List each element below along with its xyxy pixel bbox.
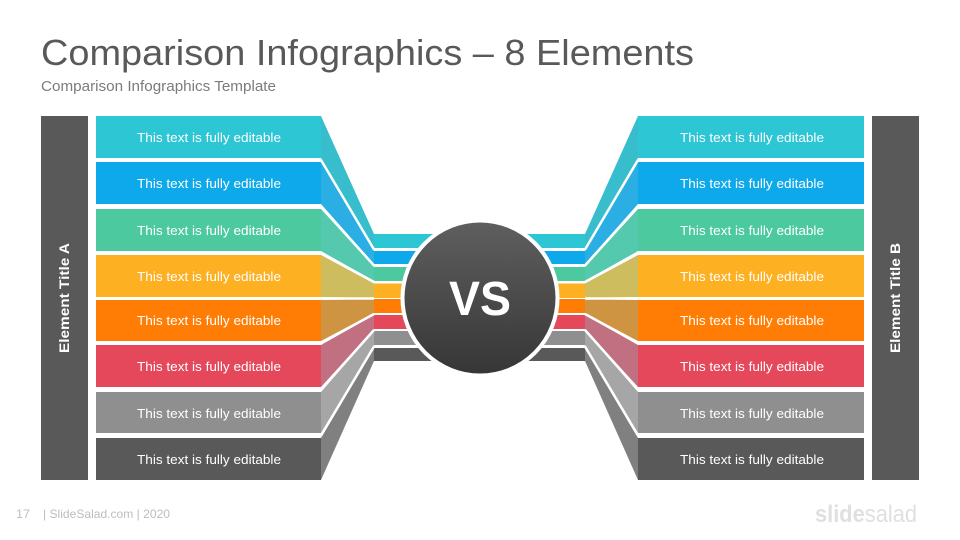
- right row 2: [480, 162, 864, 264]
- logo: slidesalad: [815, 501, 917, 528]
- left side bars: [96, 116, 480, 480]
- right row 5: [480, 299, 864, 341]
- right side bars: [480, 116, 864, 480]
- panel: element title A: [41, 116, 88, 480]
- right row 1: [480, 116, 864, 248]
- right row 6: [480, 315, 864, 387]
- left row 4: This text is fully editable: [137, 270, 281, 284]
- right row 4: [480, 255, 864, 298]
- right row 3: [480, 209, 864, 281]
- left row 1: This text is fully editable: [137, 131, 281, 145]
- right row 6: This text is fully editable: [680, 360, 824, 374]
- left row 6: [96, 315, 480, 387]
- VS circle: [402, 220, 558, 376]
- left row 5: This text is fully editable: [137, 314, 281, 328]
- left row 5: [96, 299, 480, 341]
- right row 4: This text is fully editable: [680, 270, 824, 284]
- left row 7: This text is fully editable: [137, 407, 281, 421]
- left row 2: [96, 162, 480, 264]
- left row 3: This text is fully editable: [137, 224, 281, 238]
- left row 3: [96, 209, 480, 281]
- right row 5: This text is fully editable: [680, 314, 824, 328]
- left row 4: [96, 255, 480, 298]
- title: Comparison Infographics – 8 Elements: [41, 32, 694, 73]
- panel: element title B: Element Title B: [887, 243, 903, 353]
- right row 8: This text is fully editable: [680, 453, 824, 467]
- left row 8: [96, 348, 480, 480]
- panel: element title B: [872, 116, 919, 480]
- right row 2: This text is fully editable: [680, 177, 824, 191]
- subtitle: Comparison Infographics Template: [41, 79, 276, 95]
- right row 8: [480, 348, 864, 480]
- left row 6: This text is fully editable: [137, 360, 281, 374]
- left row 1: [96, 116, 480, 248]
- footer text: | SlideSalad.com | 2020: [43, 507, 170, 521]
- right row 7: [480, 331, 864, 433]
- VS circle: VS: [449, 273, 511, 326]
- left row 2: This text is fully editable: [137, 177, 281, 191]
- right row 7: This text is fully editable: [680, 407, 824, 421]
- right row 1: This text is fully editable: [680, 131, 824, 145]
- left row 8: This text is fully editable: [137, 453, 281, 467]
- left row 7: [96, 331, 480, 433]
- right row 3: This text is fully editable: [680, 224, 824, 238]
- page number: 17: [16, 507, 30, 521]
- panel: element title A: Element Title A: [56, 243, 72, 353]
